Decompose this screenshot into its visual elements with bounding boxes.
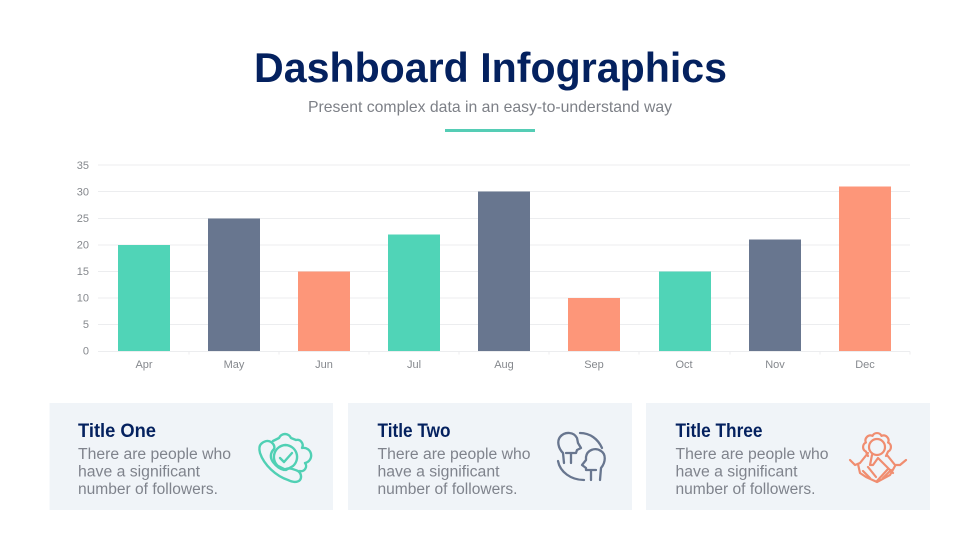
y axis labels: 20: [77, 240, 89, 252]
card text one: [78, 446, 231, 498]
card text two: number of followers.: [378, 481, 518, 498]
x axis labels: Jun: [315, 359, 333, 371]
icon: gear with phone: [259, 434, 311, 482]
x axis labels: Jul: [407, 359, 421, 371]
panel: title three: [646, 403, 930, 510]
bar chart: [77, 160, 910, 371]
card text one: number of followers.: [78, 481, 218, 498]
card heading three: Title Three: [676, 421, 762, 442]
card text three: There are people who: [676, 446, 828, 463]
x axis labels: Nov: [765, 359, 785, 371]
y axis labels: 30: [77, 186, 89, 198]
title: Dashboard Infographics: [254, 44, 727, 91]
card text three: [676, 446, 828, 498]
icon: two heads: [558, 433, 605, 480]
accent underline: [445, 129, 535, 132]
x axis labels: Apr: [135, 359, 153, 371]
card text two: have a significant: [378, 464, 500, 480]
panel: title two: [348, 403, 632, 510]
card text one: There are people who: [78, 446, 231, 463]
card heading two: Title Two: [378, 421, 450, 442]
card text two: [378, 446, 530, 498]
x axis labels: Sep: [584, 359, 604, 371]
panel: title one: [50, 403, 333, 510]
x axis labels: [135, 359, 875, 371]
y axis labels: 10: [77, 292, 89, 304]
card text two: There are people who: [378, 446, 530, 463]
y axis labels: 35: [77, 160, 89, 172]
x axis labels: May: [224, 359, 245, 371]
y axis labels: 25: [77, 213, 89, 225]
y axis labels: 15: [77, 266, 89, 278]
icon: gear and handshake: [850, 433, 906, 482]
x axis labels: Aug: [494, 359, 514, 371]
bars: [118, 186, 891, 351]
y axis labels: [77, 160, 89, 358]
y axis labels: 5: [83, 319, 89, 331]
card text three: number of followers.: [676, 481, 816, 498]
card heading one: Title One: [78, 421, 156, 442]
card text three: have a significant: [676, 464, 798, 480]
x axis labels: Dec: [855, 359, 875, 371]
y axis labels: 0: [83, 346, 89, 358]
card text one: have a significant: [78, 464, 201, 480]
x axis labels: Oct: [675, 359, 693, 371]
subtitle: Present complex data in an easy-to-understand way: [308, 99, 672, 116]
